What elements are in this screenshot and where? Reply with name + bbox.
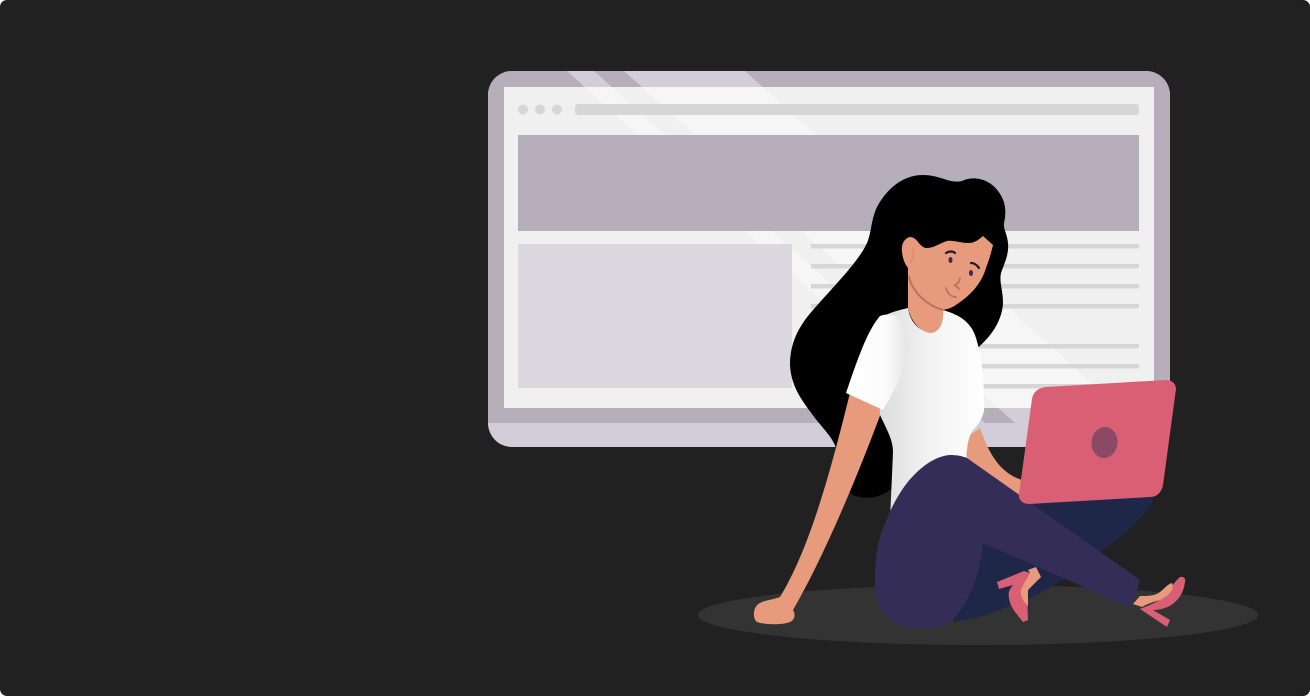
woman xyxy=(754,175,1185,628)
navy back leg xyxy=(953,495,1153,622)
jaw shadow xyxy=(909,277,943,310)
monitor frame xyxy=(488,71,1170,423)
hair xyxy=(790,175,1008,498)
front foot xyxy=(1133,583,1173,607)
back shoe xyxy=(997,567,1041,622)
laptop lid xyxy=(1019,380,1176,504)
near arm xyxy=(754,385,884,624)
shirt sleeve xyxy=(846,314,908,410)
purple front leg xyxy=(875,455,1140,628)
floor shadow xyxy=(698,585,1258,645)
front shoe xyxy=(1140,577,1185,627)
neck and face xyxy=(902,236,993,333)
window control dots xyxy=(518,104,562,114)
laptop logo xyxy=(1090,426,1119,459)
address bar xyxy=(575,104,1139,115)
banner block xyxy=(518,135,1139,231)
text lines xyxy=(811,244,1139,388)
eyes and brows xyxy=(946,252,979,276)
back shoe shape xyxy=(997,571,1034,622)
image block xyxy=(518,244,792,388)
monitor chin xyxy=(488,71,1170,447)
nose and mouth xyxy=(946,278,960,297)
shirt xyxy=(878,308,984,520)
browser window xyxy=(488,71,1170,447)
far arm xyxy=(967,428,1022,499)
screen xyxy=(504,87,1154,408)
frame glare xyxy=(567,71,1031,423)
laptop xyxy=(1019,380,1176,504)
back foot xyxy=(1021,567,1041,606)
screen glare xyxy=(567,71,1136,423)
ear detail xyxy=(910,247,913,263)
